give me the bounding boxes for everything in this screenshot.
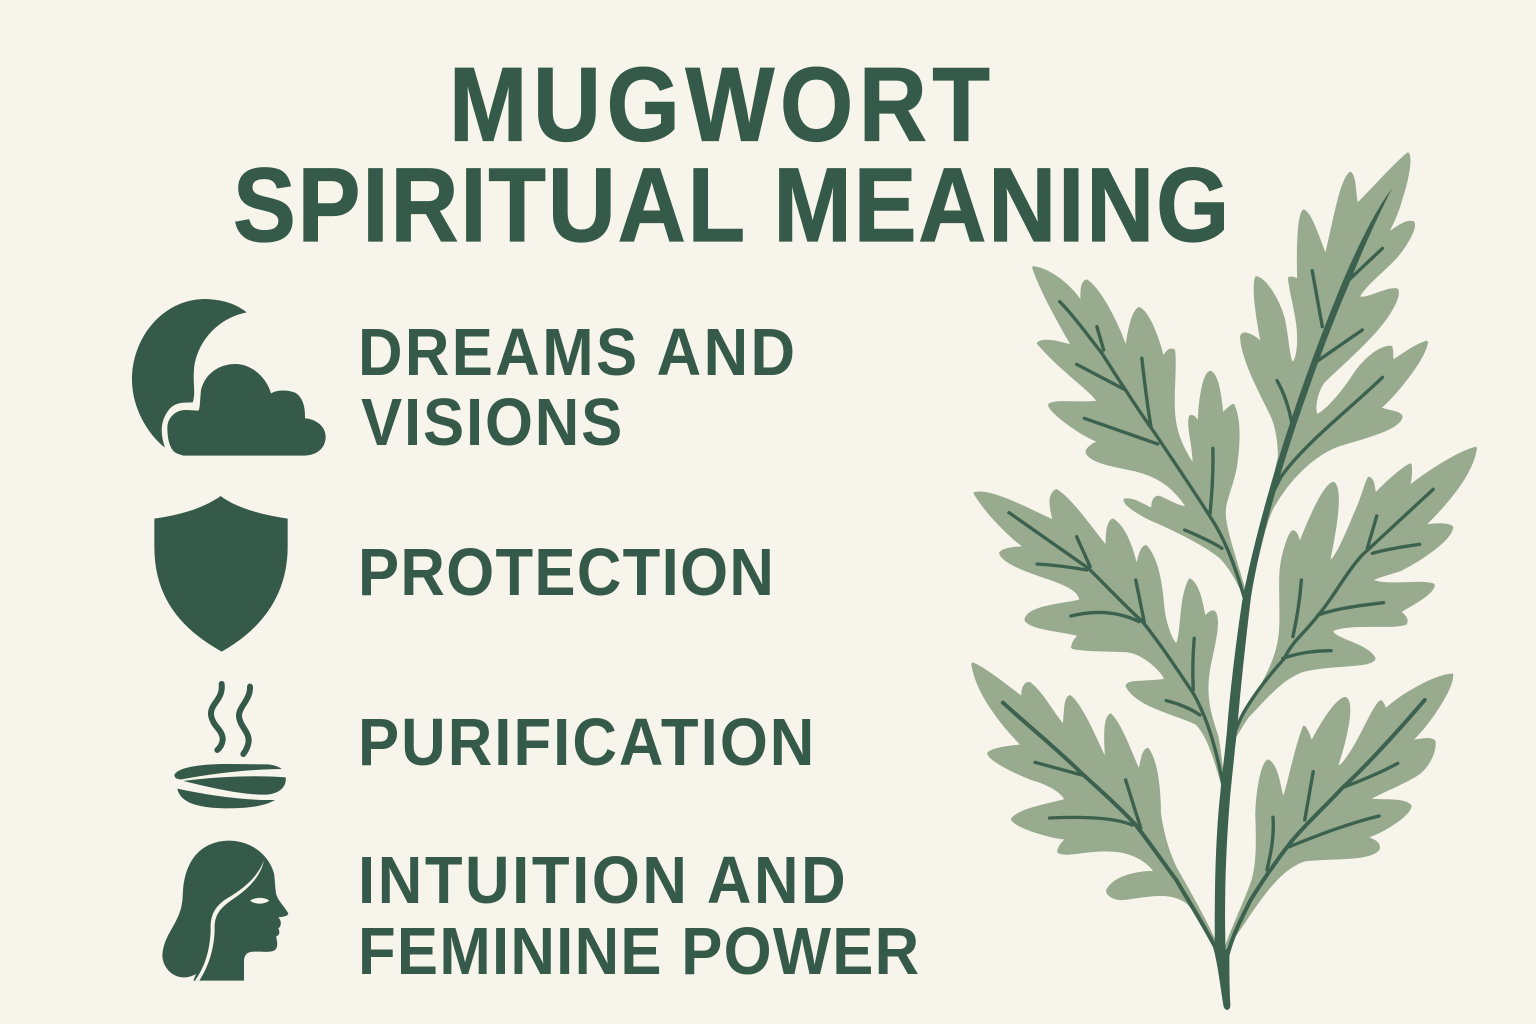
icon: crescent moon and cloud xyxy=(132,299,326,456)
label: intuition and feminine power xyxy=(358,843,919,989)
label: dreams and visions: VISIONS xyxy=(361,385,622,460)
icon: shield xyxy=(154,496,288,652)
label: intuition and feminine power: INTUITION AND xyxy=(358,843,846,918)
label: purification: PURIFICATION xyxy=(358,705,814,780)
label: dreams and visions: DREAMS AND xyxy=(358,315,795,390)
leaf: upper left xyxy=(1034,268,1246,597)
title: SPIRITUAL MEANING xyxy=(233,147,1229,264)
main stem xyxy=(1212,189,1392,1010)
leaf: lower left xyxy=(973,664,1220,957)
label: dreams and visions xyxy=(358,315,795,460)
illustration: mugwort plant xyxy=(973,154,1475,1010)
leaf: middle right xyxy=(1232,448,1475,740)
title: MUGWORT xyxy=(449,47,990,164)
icon: smoking bowl xyxy=(174,684,286,808)
leaf: middle left xyxy=(975,491,1224,788)
leaf: top right xyxy=(1242,154,1426,583)
leaf: lower right xyxy=(1225,675,1452,957)
icon: woman's profile xyxy=(162,841,288,981)
title xyxy=(233,47,1229,264)
label: intuition and feminine power: FEMININE POWER xyxy=(358,914,919,989)
label: protection: PROTECTION xyxy=(358,535,774,610)
